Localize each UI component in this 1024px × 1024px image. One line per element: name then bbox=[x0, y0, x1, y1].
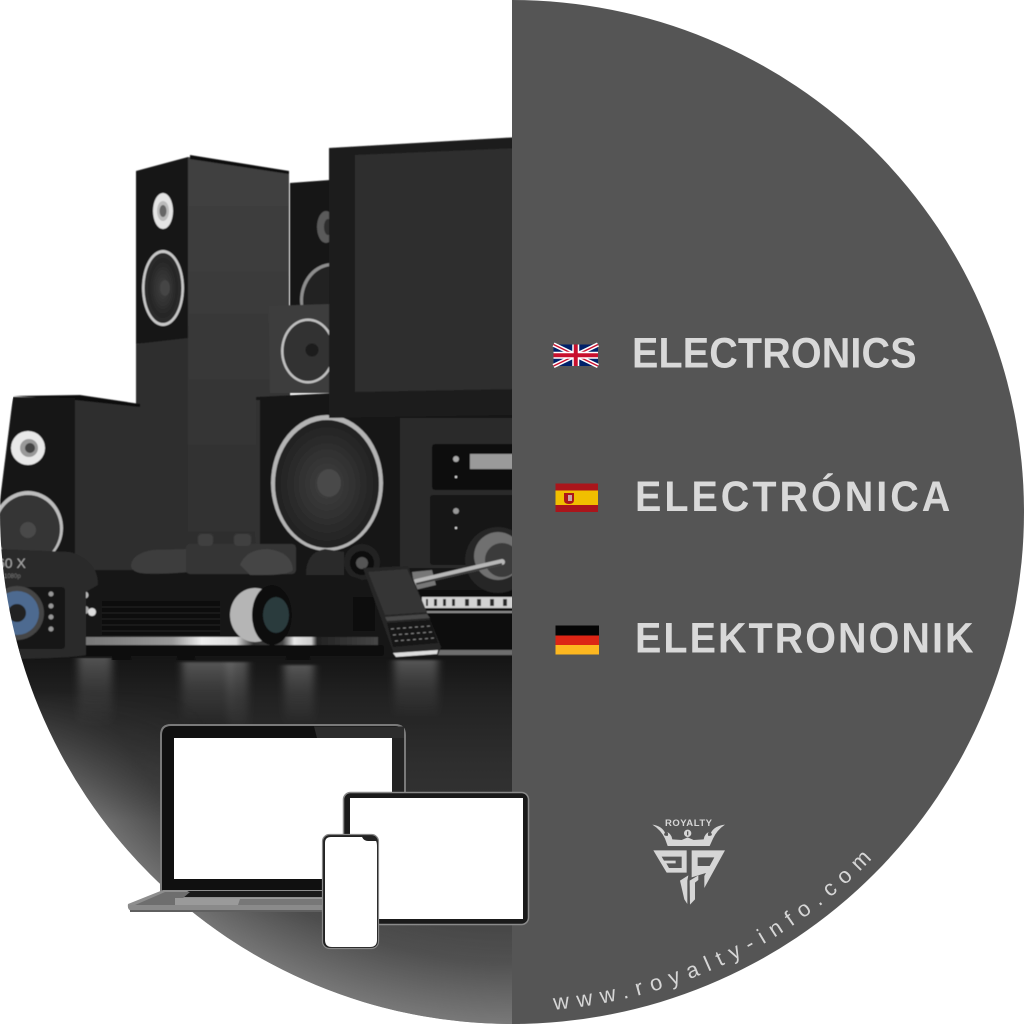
turntable bbox=[411, 527, 512, 656]
row: Spanish label bbox=[556, 473, 950, 520]
speaker: tall tower bbox=[136, 155, 290, 570]
logo monogram left letter bbox=[653, 850, 687, 873]
laptop mockup bbox=[128, 725, 405, 912]
camcorder bbox=[0, 549, 98, 659]
logo wordmark: ROYALTY bbox=[665, 818, 713, 829]
speaker: front left tower bbox=[0, 395, 140, 570]
photo: home electronics collection bbox=[0, 136, 520, 1024]
audio receiver stack bbox=[400, 418, 520, 568]
speaker: subwoofer cabinet bbox=[256, 392, 512, 556]
laptop lid bbox=[161, 725, 405, 893]
tablet screen bbox=[350, 798, 523, 919]
monitor screen bbox=[329, 137, 520, 418]
camcorder: 1080p bbox=[4, 574, 21, 580]
mobile phone bbox=[363, 566, 441, 657]
flag: Spain bbox=[556, 484, 598, 512]
website address on curved path: www.royalty-info.com bbox=[552, 852, 872, 1010]
smartphone screen bbox=[325, 837, 377, 947]
flag: Germany bbox=[556, 626, 599, 654]
label: ELECTRONICA: ELECTRÓNICA bbox=[635, 473, 950, 520]
panel: dark right half of the disc bbox=[512, 0, 1024, 1024]
smartphone mockup bbox=[322, 834, 378, 948]
logo crown bbox=[652, 825, 725, 846]
label: ELEKTRONONIK: ELEKTRONONIK bbox=[635, 614, 974, 662]
game controller bbox=[131, 534, 380, 580]
logo monogram right letter bbox=[692, 850, 725, 888]
logo: Royalty crown emblem bbox=[652, 818, 725, 905]
laptop base bbox=[128, 890, 330, 912]
logo monogram stem bbox=[680, 875, 698, 905]
label: ELECTRONICS: ELECTRONICS bbox=[632, 329, 917, 377]
tablet mockup bbox=[344, 792, 528, 924]
row: German label bbox=[556, 614, 974, 662]
speaker: rear right tower bbox=[290, 180, 364, 337]
speaker: small centre box bbox=[280, 304, 330, 394]
video projector bbox=[81, 575, 384, 664]
dark backdrop behind the equipment bbox=[74, 569, 512, 658]
laptop screen bbox=[174, 738, 392, 879]
row: English label bbox=[554, 329, 917, 377]
logo crown jewel bbox=[684, 830, 691, 837]
flag: United Kingdom bbox=[554, 344, 598, 366]
floor with reflections bbox=[19, 650, 520, 1024]
